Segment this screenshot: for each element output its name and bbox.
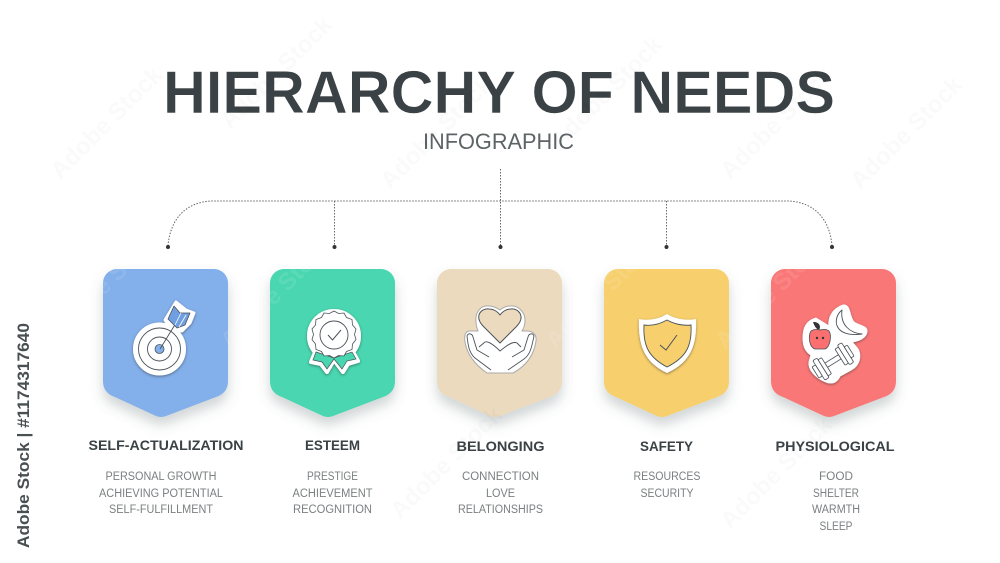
icon: apple, moon and dumbbell [803,305,867,383]
label: self-actualization: SELF-ACTUALIZATION [88,437,243,453]
panel: esteem [270,269,395,417]
connector lines [166,169,834,249]
panel: belonging [437,269,562,417]
watermark on cards [45,221,833,354]
text: self-actualization details: ACHIEVING POTENTIAL [99,488,224,500]
card: physiological [771,269,896,417]
card: belonging [437,269,562,417]
card: self-actualization [103,269,228,417]
watermark pattern: Adobe Stock [715,61,838,184]
text: belonging details [458,471,543,516]
text: esteem details: ACHIEVEMENT [292,488,372,500]
text: self-actualization details [99,471,224,516]
icon: hands holding heart [465,306,536,373]
label: physiological: PHYSIOLOGICAL [776,438,895,454]
text: belonging details: RELATIONSHIPS [458,504,543,516]
text: self-actualization details: SELF-FULFILLMENT [109,504,213,516]
watermark credit: Adobe Stock | #1174317640 [15,323,33,548]
watermark on cards: Adobe Stock [710,231,833,354]
text: belonging details: CONNECTION [462,471,539,483]
text: esteem details: PRESTIGE [307,471,358,483]
watermark pattern: Adobe Stock [375,71,498,194]
card: esteem [270,269,395,417]
text: physiological details: SLEEP [820,521,853,533]
title: HIERARCHY OF NEEDS [163,59,835,126]
labels [88,437,895,454]
watermark on cards: Adobe Stock [215,231,338,354]
text: safety details: RESOURCES [634,471,701,483]
label: esteem: ESTEEM [305,437,360,453]
icon: shield with check [639,314,696,373]
text: physiological details: SHELTER [813,488,859,500]
label: belonging: BELONGING [456,438,545,454]
text: physiological details [812,471,860,533]
watermark pattern: Adobe Stock [385,401,508,524]
icon: target and arrow [134,302,194,374]
text: safety details [634,471,701,500]
label: safety: SAFETY [640,438,694,454]
text: self-actualization details: PERSONAL GROWTH [106,471,216,483]
watermark on cards: Adobe Stock [45,221,168,344]
text: belonging details: LOVE [486,488,515,500]
panel: self-actualization [103,269,228,417]
watermark pattern: Adobe Stock [545,31,668,154]
watermark pattern: Adobe Stock [215,11,338,134]
text: physiological details: FOOD [819,471,853,483]
watermark pattern: Adobe Stock [45,61,168,184]
watermark pattern: Adobe Stock [715,411,838,534]
text: physiological details: WARMTH [812,504,860,516]
text: esteem details: RECOGNITION [293,504,372,516]
watermark pattern: Adobe Stock [845,71,968,194]
text: esteem details [292,471,372,516]
text: safety details: SECURITY [640,488,694,500]
card: safety [604,269,729,417]
panel: physiological [771,269,896,417]
icon: award badge [309,311,359,372]
subtitle: INFOGRAPHIC [423,129,574,154]
watermark on cards: Adobe Stock [540,231,663,354]
panel: safety [604,269,729,417]
